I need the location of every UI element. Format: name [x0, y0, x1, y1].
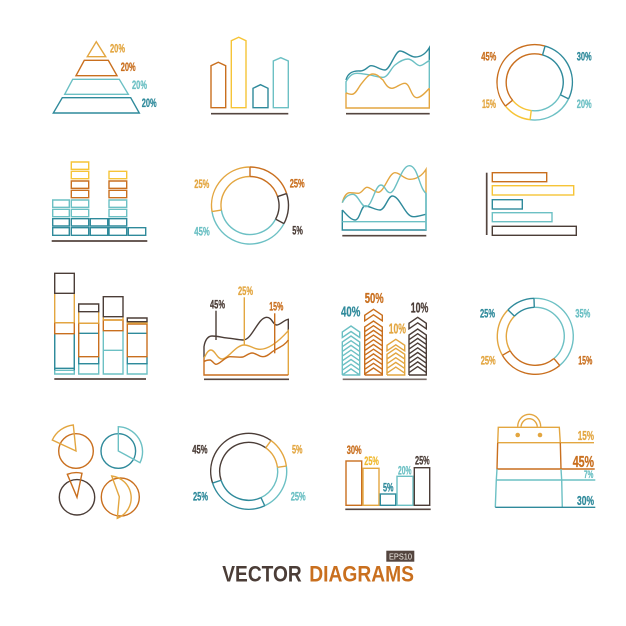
- panel: shopping bag diagram: 30%: [577, 493, 594, 508]
- panel: chevron arrow columns: 10%: [389, 320, 406, 337]
- panel: donut chart one: [481, 29, 592, 135]
- panel: labelled bar chart: 20%: [398, 464, 412, 478]
- panel: labelled bar chart: 25%: [364, 454, 379, 468]
- panel: chevron arrow columns: 50%: [365, 290, 384, 307]
- panel: donut chart four: 25%: [291, 490, 306, 504]
- pie: teal with light teal wedge: [101, 427, 143, 468]
- panel: donut chart one: 45%: [481, 50, 496, 64]
- panel: labelled bar chart: [345, 443, 431, 509]
- panel: area chart with pins: 15%: [269, 300, 283, 314]
- panel: pyramid chart: 20%: [132, 78, 147, 92]
- panel: area chart with pins: 45%: [210, 297, 225, 311]
- panel: donut chart two: 45%: [194, 224, 210, 238]
- panel: area chart with pins: [204, 284, 289, 379]
- panel: pyramid chart: 20%: [110, 41, 125, 55]
- panel: donut chart four: 25%: [193, 490, 208, 504]
- panel: labelled bar chart: 25%: [415, 454, 430, 468]
- panel: donut chart one: 30%: [577, 50, 592, 64]
- panel: donut chart one: 15%: [482, 97, 496, 111]
- panel: horizontal bar chart: [487, 173, 576, 235]
- badge: EPS10: EPS10: [389, 552, 412, 562]
- panel: pyramid chart: 20%: [121, 60, 136, 74]
- panel: shopping bag diagram: 45%: [573, 454, 594, 471]
- panel: donut chart three: 25%: [481, 354, 496, 368]
- panel: donut chart two: [194, 153, 305, 258]
- panel: house-shaped bar chart: [211, 37, 288, 114]
- panel: labelled bar chart: 30%: [347, 443, 362, 457]
- panel: shopping bag diagram: 15%: [578, 428, 594, 443]
- panel: donut chart three: [480, 283, 592, 390]
- panel: shopping bag diagram: [495, 414, 595, 508]
- panel: stacked column chart: [54, 273, 147, 379]
- panel: donut chart four: [192, 418, 306, 524]
- panel: pyramid chart: 20%: [142, 96, 157, 110]
- panel: chevron arrow columns: [341, 290, 428, 379]
- panel: donut chart four: 5%: [292, 443, 303, 457]
- panel: shopping bag diagram: 7%: [584, 469, 593, 481]
- panel: donut chart two: 5%: [292, 224, 303, 238]
- pie: dark with orange wedge: [59, 473, 95, 515]
- panel: donut chart three: 35%: [575, 306, 590, 320]
- panel: donut chart three: 15%: [578, 354, 592, 368]
- panel: donut chart one: 20%: [577, 97, 592, 111]
- panel: donut chart four: 45%: [192, 443, 208, 457]
- panel: pyramid chart: [53, 41, 157, 113]
- pie: orange with gold wedge: [52, 425, 93, 468]
- pie: orange with gold wedge large: [101, 476, 139, 518]
- panel: donut chart two: 25%: [290, 176, 305, 190]
- title: vector diagrams: DIAGRAMS: [309, 562, 414, 587]
- panel: donut chart three: 25%: [480, 306, 495, 320]
- panel: area chart with pins: 25%: [238, 284, 253, 298]
- panel: equalizer stacked blocks: [52, 162, 147, 241]
- panel: labelled bar chart: 5%: [383, 481, 394, 495]
- panel: area chart two: [342, 166, 426, 236]
- panel: donut chart two: 25%: [194, 177, 209, 191]
- title: vector diagrams: VECTOR: [222, 562, 302, 587]
- panel: area chart one: [346, 48, 430, 114]
- title: vector diagrams: [222, 562, 414, 587]
- panel: four pie diagrams: [52, 425, 143, 518]
- panel: chevron arrow columns: 40%: [341, 303, 360, 320]
- panel: chevron arrow columns: 10%: [411, 299, 428, 316]
